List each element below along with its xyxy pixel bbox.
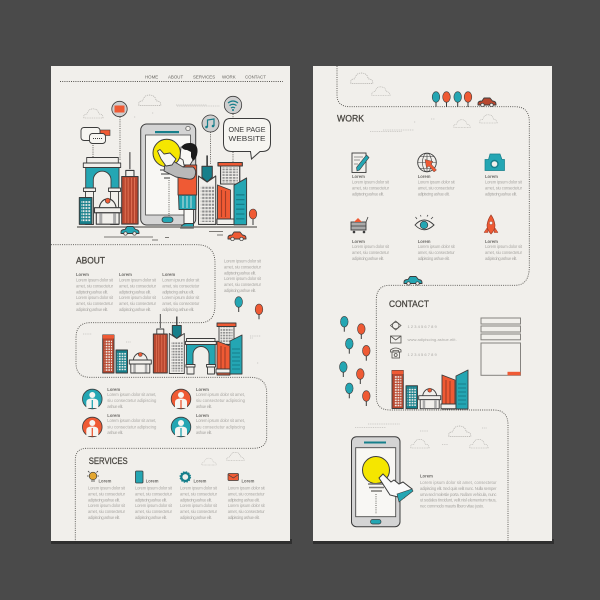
icon: cart <box>351 217 368 233</box>
text: work row 1: Lorem <box>485 174 498 179</box>
icon: camera <box>485 154 504 170</box>
icon: person teal <box>82 389 102 409</box>
text: about side column: amet, siu consectetur <box>224 264 262 270</box>
text: services columns: Lorem ipsum dolor sit <box>228 503 266 508</box>
text: person blocks: Lorem <box>107 387 120 392</box>
text: services columns: Lorem ipsum dolor sit <box>135 503 173 508</box>
text: contact details: www.adipiscing.ashue.elit. <box>408 337 457 342</box>
text: person blocks: Lorem ipsum dolor sit amet, <box>107 418 156 423</box>
navigation: CONTACT <box>245 74 266 80</box>
heading: about: ABOUT <box>76 255 106 265</box>
person icons <box>82 389 191 437</box>
text: work row 1: Lorem ipsum dolor sit <box>485 180 523 184</box>
text: about column 3: adipiscing ashue elit. <box>162 307 194 312</box>
text: work row 1: adipiscing ashue elit. <box>418 192 450 196</box>
text: bottom description: ut sodales tincidunt, velit nisl elementum risus, <box>420 498 496 502</box>
text: work row 2: amet, siu consectetur <box>418 250 455 255</box>
text: services columns: adipiscing ashue elit. <box>228 498 260 502</box>
text: about side column: Lorem ipsum dolor sit <box>224 258 262 264</box>
text: services columns: amet, siu consectetur <box>180 492 218 496</box>
icon: wifi badge <box>224 96 242 162</box>
clouds: bottom <box>355 424 488 448</box>
marks: about dashes <box>83 334 261 363</box>
clouds: work <box>351 73 497 132</box>
text: services columns: adipiscing ashue elit. <box>180 498 212 502</box>
text: services columns: adipiscing ashue elit. <box>135 498 167 502</box>
icon: tablet <box>136 471 143 483</box>
text: services columns: Lorem ipsum dolor sit <box>180 486 218 490</box>
icon: eye <box>415 215 434 230</box>
text: contact details: 123456789 <box>408 324 438 329</box>
panel: right page <box>313 66 552 541</box>
text: about column 3: Lorem ipsum dolor sit <box>162 295 200 300</box>
text: person blocks: ashue elit. <box>196 404 212 409</box>
form <box>481 318 520 375</box>
text: work row 2 <box>352 239 523 261</box>
text: about column 1: adipiscing ashue elit. <box>76 290 108 294</box>
icon: bulb <box>87 471 99 481</box>
text: person blocks: ashue elit. <box>107 430 123 435</box>
navigation: WORK <box>222 74 236 80</box>
text: work row 1: amet, siu consectetur <box>418 186 455 190</box>
text: work row 2: Lorem <box>352 239 365 244</box>
navigation: HOME <box>145 74 158 80</box>
text: about side column: Lorem ipsum dolor sit <box>224 276 262 281</box>
panel shadows <box>51 539 554 544</box>
text: work row 2: Lorem ipsum dolor sit <box>418 244 456 249</box>
text: work row 2: Lorem ipsum dolor sit <box>485 244 523 249</box>
clouds and dashes <box>84 95 220 118</box>
text: person blocks: Lorem ipsum dolor sit amet, <box>107 392 156 397</box>
road marks <box>104 232 223 240</box>
text: about column 2: Lorem <box>119 272 132 277</box>
text: services columns: amet, siu consectetur <box>135 509 173 514</box>
skyline: about section <box>103 314 242 375</box>
panel: left page <box>51 66 290 541</box>
text: about side column: adipiscing ashue elit. <box>224 270 256 276</box>
heading: work: WORK <box>337 114 364 124</box>
text: bottom description: urna sed molestie porta. Nullam vehicula, nunc <box>420 492 496 497</box>
text: services columns: amet, siu consectetur <box>228 509 265 514</box>
text: about side column: amet, siu consectetur <box>224 282 262 287</box>
text: about side column: adipiscing ashue elit. <box>224 288 256 293</box>
text: person blocks: ashue elit. <box>107 404 123 409</box>
text: about column 3: adipiscing ashue elit. <box>162 290 194 294</box>
icon: pointing hand <box>379 474 413 502</box>
text: person blocks: siu consectetur adipiscing <box>107 398 157 403</box>
text: about column 2: Lorem ipsum dolor sit <box>119 295 157 300</box>
text: work row 1: Lorem <box>352 174 365 179</box>
text: about column 2 <box>119 272 157 312</box>
ground <box>77 226 257 228</box>
text: work row 1: Lorem ipsum dolor sit <box>418 180 456 184</box>
text: person blocks <box>107 387 246 435</box>
text: work row 2: Lorem <box>418 239 431 244</box>
text: work row 1: Lorem <box>418 174 431 179</box>
navigation: SERVICES <box>193 74 215 80</box>
text: person blocks: siu consectetur adipiscing <box>196 398 246 403</box>
text: person blocks: Lorem ipsum dolor sit amet, <box>196 418 245 423</box>
speech bubble: one page website <box>224 118 270 159</box>
text: contact details <box>408 324 457 357</box>
text: about column 2: amet, siu consectetur <box>119 284 157 288</box>
text: services columns: adipiscing ashue elit. <box>180 515 212 520</box>
text: work row 2: adipiscing ashue elit. <box>352 256 384 261</box>
text: services columns: adipiscing ashue elit. <box>88 515 120 520</box>
text: work row 2: Lorem <box>485 239 498 244</box>
text: work row 1 <box>352 174 523 196</box>
text: contact details: 123456789 <box>408 352 438 357</box>
icon: person red 2 <box>82 417 102 437</box>
text: person blocks: siu consectetur adipiscing <box>196 424 246 430</box>
text: services columns: adipiscing ashue elit. <box>135 515 167 520</box>
text: services columns: Lorem <box>194 478 207 484</box>
heading: contact: CONTACT <box>389 299 430 309</box>
text: person blocks: Lorem ipsum dolor sit amet, <box>196 392 245 397</box>
car: teal <box>404 276 422 285</box>
icon: envelope <box>228 474 238 480</box>
speech bubble: one page website: WEBSITE <box>228 134 266 143</box>
text: about column 3: Lorem <box>162 272 175 277</box>
text: work row 1: amet, siu consectetur <box>485 186 523 190</box>
text: about column 1: amet, siu consectetur <box>76 284 114 288</box>
navigation <box>145 74 266 80</box>
person pointing at phone <box>158 143 198 228</box>
text: about column 1: Lorem ipsum dolor sit <box>76 278 114 282</box>
text: services columns <box>88 478 266 520</box>
icon: bulb <box>362 456 390 514</box>
icon: gear <box>180 472 191 482</box>
text: work row 1: adipiscing ashue elit. <box>485 192 517 196</box>
text: work row 2: amet, siu consectetur <box>485 250 523 255</box>
text: services columns: amet, siu consectetur <box>180 509 218 514</box>
text: bottom description: Lorem <box>420 474 433 478</box>
text: about column 2: adipiscing ashue elit. <box>119 290 151 294</box>
text: bottom description: adipiscing elit. Sed quis velit nunc. Nulla semper <box>420 486 497 491</box>
text: services columns: adipiscing ashue elit. <box>88 498 120 502</box>
car: red <box>228 232 246 241</box>
icon: globe cursor <box>418 153 436 172</box>
icon: person teal 2 <box>171 417 191 437</box>
text: services columns: Lorem ipsum dolor sit <box>88 486 126 490</box>
text: services columns: Lorem ipsum dolor sit <box>135 486 173 490</box>
text: about column 2: Lorem ipsum dolor sit <box>119 278 157 282</box>
text: about column 3: amet, siu consectetur <box>162 284 200 288</box>
skyline: contact <box>392 370 468 409</box>
icon: telephone <box>390 348 401 358</box>
text: about column 3: amet, siu consectetur <box>162 301 200 306</box>
skyline: hero left buildings <box>79 152 138 224</box>
text: work row 1: Lorem ipsum dolor sit <box>352 180 390 184</box>
text: services columns: Lorem ipsum dolor sit <box>228 486 266 490</box>
text: work row 2: amet, siu consectetur <box>352 250 390 255</box>
text: services columns: Lorem ipsum dolor sit <box>180 503 218 508</box>
text: work row 1: adipiscing ashue elit. <box>352 192 384 196</box>
text: bottom description <box>420 474 497 508</box>
text: about column 2: adipiscing ashue elit. <box>119 307 151 312</box>
heading: services: SERVICES <box>89 456 128 466</box>
phone with bulb <box>141 124 196 225</box>
text: services columns: Lorem <box>98 478 112 484</box>
speech bubble: one page website: ONE PAGE <box>228 125 266 134</box>
navigation: ABOUT <box>168 74 183 80</box>
icon: headset <box>390 321 401 330</box>
path: top dotted divider <box>60 80 283 82</box>
trees: contact <box>340 316 370 406</box>
text: services columns: adipiscing ashue elit. <box>228 515 260 520</box>
text: services columns: amet, siu consectetur <box>228 492 265 496</box>
text: services columns: Lorem <box>146 478 159 484</box>
icon: person red <box>171 389 191 409</box>
text: person blocks: Lorem <box>196 413 209 418</box>
text: bottom description: nec commodo mauris libero vitae justo. <box>420 504 484 508</box>
text: person blocks: siu consectetur adipiscing <box>107 424 157 430</box>
text: work row 2: adipiscing ashue elit. <box>418 256 450 261</box>
hero arch <box>83 158 121 224</box>
path: right page route <box>337 66 529 541</box>
icon: music badge <box>202 115 219 164</box>
text: about column 1: amet, siu consectetur <box>76 301 114 306</box>
trees: top row <box>432 92 472 107</box>
text: services columns: Lorem ipsum dolor sit <box>88 503 126 508</box>
text: work row 2: Lorem ipsum dolor sit <box>352 244 390 249</box>
trees <box>235 297 263 319</box>
car: red top <box>478 98 496 107</box>
clouds: services <box>202 452 244 465</box>
text: bottom description: Lorem ipsum dolor sit amet, consectetur <box>420 480 497 485</box>
text: services columns: amet, siu consectetur <box>88 509 126 514</box>
text: about column 1: adipiscing ashue elit. <box>76 307 108 312</box>
skyline: hero right buildings <box>198 155 247 225</box>
phone with bulb and hand <box>352 437 413 527</box>
text: work row 1: amet, siu consectetur <box>352 186 390 190</box>
icon: message badge <box>112 101 127 160</box>
text: about side column <box>224 258 262 293</box>
car: teal <box>121 226 139 235</box>
text: work row 2: adipiscing ashue elit. <box>485 256 517 261</box>
text: about column 3: Lorem ipsum dolor sit <box>162 278 200 282</box>
text: services columns: Lorem <box>242 478 255 484</box>
text: about column 1 <box>76 272 114 312</box>
icon: mail <box>390 336 401 343</box>
text: about column 2: amet, siu consectetur <box>119 301 157 306</box>
text: about column 1: Lorem <box>76 272 89 277</box>
tree <box>249 209 257 225</box>
text: person blocks: Lorem <box>107 413 120 418</box>
text: services columns: amet, siu consectetur <box>135 492 173 496</box>
icon: rocket <box>484 215 498 234</box>
text: services columns: amet, siu consectetur <box>88 492 126 496</box>
text: person blocks: Lorem <box>196 387 209 392</box>
text: about column 3 <box>162 272 200 312</box>
icon: light bulb <box>153 139 180 216</box>
text: about column 1: Lorem ipsum dolor sit <box>76 295 114 300</box>
path: left page route <box>51 245 267 541</box>
icon: pencil note <box>352 153 369 172</box>
text: person blocks: ashue elit. <box>196 430 212 435</box>
icon: chat bubbles <box>81 128 110 157</box>
